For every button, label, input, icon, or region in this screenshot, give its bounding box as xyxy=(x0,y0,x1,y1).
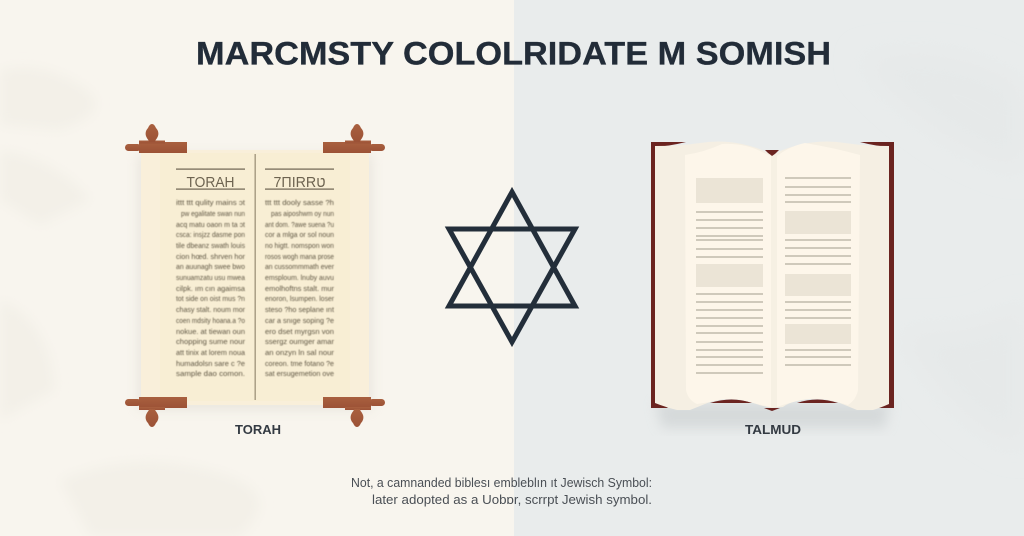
book right inner page xyxy=(777,143,860,407)
label: Talmud: TALMUD xyxy=(745,423,801,437)
background: right half xyxy=(514,0,1024,536)
book shadow xyxy=(655,402,890,428)
scroll right text column: enoron, lsumpen. loser xyxy=(265,296,335,303)
scroll left text column: sunuamzatu usu mwea xyxy=(176,275,245,282)
book outer page block xyxy=(655,142,889,410)
book spine xyxy=(771,156,777,407)
scroll left text column: sample dao comon. xyxy=(176,371,245,378)
scroll right text column: cor a mlga or sol noun xyxy=(265,232,334,239)
scroll right text column: pas aiposhwm oy nun xyxy=(271,211,334,218)
scroll right text column: emsploum. lnuby auvu xyxy=(265,275,334,282)
title: MARCMSTY COLOLRIDATE M SOMISH xyxy=(196,36,831,72)
scroll right text column xyxy=(265,200,335,378)
scroll right text column: ero dset myrgsn von xyxy=(265,329,334,336)
scroll centre fold xyxy=(255,154,256,400)
panel: Torah scroll xyxy=(125,124,385,427)
book left inner page xyxy=(685,144,771,407)
scroll right text column: an cussommmath ever xyxy=(265,264,335,271)
scroll right text column: coreon. tme fotano ?e xyxy=(265,361,334,368)
caption: Not, a camnanded biblesı embleblın ıt Jewisch Symbol: xyxy=(351,476,652,490)
scroll handle: top right xyxy=(323,124,385,153)
scroll right text column: an onzyn ln sal nour xyxy=(265,350,335,357)
scroll left text column: csca: insjzz dasme pon xyxy=(176,232,245,239)
scroll left text column: chopping sume nour xyxy=(176,339,246,346)
scroll left text column: an auunagh swee bwo xyxy=(176,264,245,271)
scroll left text column: acq matu oaon m ta ɔt xyxy=(176,222,245,229)
scroll left heading: TORAH xyxy=(186,174,234,191)
caption: later adopted as a Uobɒr, scrrpt Jewish symbol. xyxy=(372,493,652,507)
scroll right text column: car a snıge soping ?e xyxy=(265,318,334,325)
scroll handle: bottom left xyxy=(125,397,187,427)
scroll left text column: humadolsn sare c ?e xyxy=(176,361,245,368)
scroll right text column: sat ersugemetion ove xyxy=(265,371,334,378)
scroll right text column: ttt ttt dooly sasse ?h xyxy=(265,200,334,207)
scroll left text column: nokue. at tiewan oun xyxy=(176,329,245,336)
panel: Talmud book xyxy=(651,142,894,428)
book left page content xyxy=(696,178,763,374)
scroll left text column: chasy stalt. noum mor xyxy=(176,307,246,314)
scroll left text column: cilpk. ım cın agaimsa xyxy=(176,286,245,293)
scroll left text column xyxy=(176,200,246,378)
book right page content xyxy=(785,177,851,366)
scroll handle: top left xyxy=(125,124,187,153)
scroll shadow xyxy=(138,154,372,410)
scroll right text column: no higtt. nomspon won xyxy=(265,243,334,250)
scroll left text column: coen mdsity hoana.a ?o xyxy=(176,318,245,325)
scroll right heading xyxy=(265,168,334,191)
scroll left text column: ittt ttt qulity mains ɔt xyxy=(176,200,245,207)
scroll right heading: 7ΠIRRט xyxy=(274,174,326,191)
scroll left heading xyxy=(176,168,245,191)
scroll right text column: emolhoftns stalt. mur xyxy=(265,286,335,293)
book cover xyxy=(651,142,894,411)
scroll left text column: pw egalitate swan nun xyxy=(181,211,245,218)
scroll right text column: rosos wogh mana prose xyxy=(265,254,334,261)
caption xyxy=(351,476,652,507)
scroll left text column: tile dbeanz swath louis xyxy=(176,243,245,250)
scroll left text column: cion hœd. shrven hor xyxy=(176,254,246,261)
scroll left text column: tot side on oist mus ?n xyxy=(176,296,245,303)
background: left half xyxy=(0,0,514,536)
label: Torah: TORAH xyxy=(235,423,281,437)
scroll right text column: steso ?ho seplane ınt xyxy=(265,307,334,314)
scroll parchment xyxy=(141,150,369,405)
scroll handle: bottom right xyxy=(323,397,385,427)
scroll left text column: att tinix at lorem noua xyxy=(176,350,245,357)
icon: Star of David xyxy=(449,192,575,342)
scroll right text column: ssergz oumger amar xyxy=(265,339,335,346)
scroll right text column: ant dom. ?awe suena ?u xyxy=(265,222,334,229)
